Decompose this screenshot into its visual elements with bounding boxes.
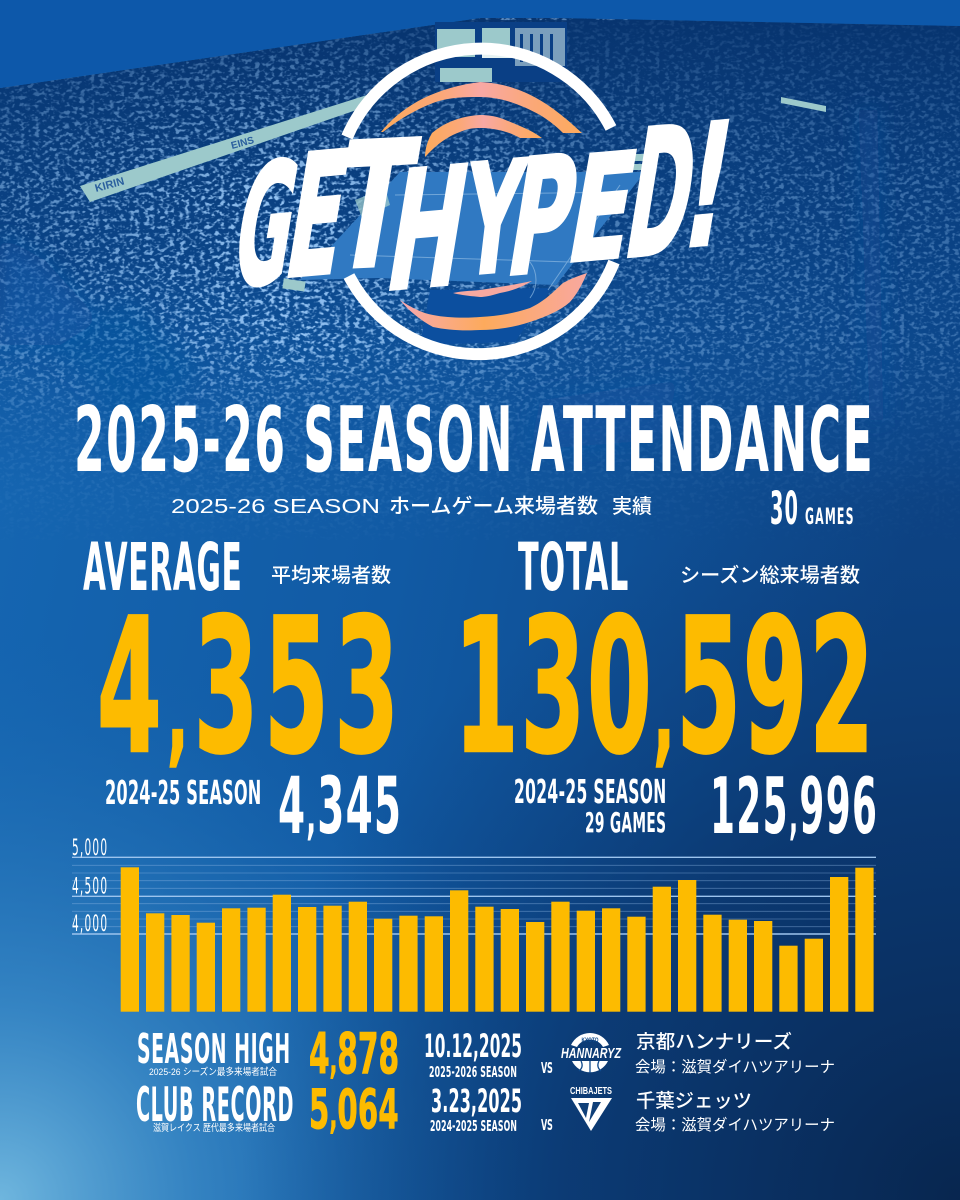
axis labels: 4,500	[72, 874, 107, 900]
ad board strip: KIRIN	[94, 176, 126, 195]
total Japanese label: シーズン総来場者数	[680, 564, 860, 587]
previous season label: 2024-25 SEASON	[105, 775, 261, 813]
venue: 会場：滋賀ダイハツアリーナ	[635, 1058, 835, 1076]
arena photo backdrop	[0, 0, 960, 540]
icon: Chiba Jets logo: CHIBAJETS	[570, 1085, 612, 1097]
panel: average	[83, 531, 401, 852]
ad board strip: EINS	[230, 135, 256, 152]
previous season average: 4,345	[278, 761, 401, 852]
ad board strip	[80, 95, 368, 202]
logo lettering: Y	[453, 127, 533, 311]
season high heading: SEASON HIGH	[137, 1024, 290, 1073]
total heading: TOTAL	[518, 530, 628, 607]
games count	[770, 484, 854, 536]
logo lettering: E	[557, 121, 649, 298]
season high value: 4,878	[309, 1021, 399, 1087]
scoreboard	[435, 22, 567, 82]
logo lettering: E	[274, 114, 362, 317]
season high date: 10.12,2025	[424, 1028, 522, 1065]
icon: Kyoto Hannaryz logo	[561, 1033, 622, 1073]
games count: 30	[770, 484, 798, 536]
panel: season high	[137, 1021, 835, 1087]
logo lettering: P	[497, 120, 589, 313]
subtitle: 2025-26 SEASON	[171, 496, 380, 518]
logo lettering: H	[376, 131, 481, 329]
average value: 4,353	[97, 579, 399, 795]
bar chart: attendance per game	[72, 836, 876, 1012]
club record season: 2024-2025 SEASON	[430, 1117, 517, 1135]
icon: Kyoto Hannaryz logo: HANNARYZ	[561, 1045, 622, 1062]
club record heading: CLUB RECORD	[136, 1079, 293, 1133]
logo ring	[347, 49, 614, 354]
previous season total: 125,996	[710, 762, 877, 852]
opponent name: 京都ハンナリーズ	[636, 1030, 792, 1053]
title: 2025-26 SEASON ATTENDANCE	[74, 387, 873, 493]
panel: club record	[136, 1079, 835, 1142]
subtitle	[171, 495, 652, 518]
total value: 130,592	[454, 579, 874, 795]
versus label: VS	[541, 1059, 553, 1077]
average heading: AVERAGE	[83, 531, 242, 607]
previous season label: 2024-25 SEASON	[514, 774, 666, 812]
panel: total	[454, 530, 877, 852]
opponent name: 千葉ジェッツ	[636, 1090, 752, 1112]
logo lettering: !	[670, 86, 747, 287]
logo lettering: G	[222, 126, 310, 326]
axis labels: 5,000	[72, 836, 107, 861]
club record value: 5,064	[309, 1079, 399, 1142]
logo peach arcs	[381, 82, 587, 330]
icon: Chiba Jets logo	[570, 1085, 612, 1131]
games count: GAMES	[805, 505, 854, 530]
icon: Kyoto Hannaryz logo: KYOTO	[582, 1037, 598, 1044]
club record sublabel: 滋賀レイクス 歴代最多来場者試合	[153, 1122, 275, 1134]
versus label: VS	[541, 1116, 553, 1134]
average Japanese label: 平均来場者数	[271, 564, 391, 587]
axis labels: 4,000	[72, 912, 107, 937]
season high season: 2025-2026 SEASON	[429, 1063, 517, 1081]
venue: 会場：滋賀ダイハツアリーナ	[635, 1116, 835, 1134]
logo lettering: D	[614, 88, 710, 299]
club record date: 3.23,2025	[431, 1083, 522, 1120]
subtitle: ホームゲーム来場者数	[389, 495, 598, 518]
logo lettering	[222, 86, 747, 329]
axis labels	[72, 836, 107, 937]
season high sublabel: 2025-26 シーズン最多来場者試合	[149, 1066, 277, 1078]
bars	[121, 867, 874, 1012]
subtitle: 実績	[612, 495, 652, 518]
logo: GET HYPED!	[222, 49, 747, 354]
logo lettering: T	[321, 104, 427, 310]
previous season games: 29 GAMES	[585, 808, 666, 840]
